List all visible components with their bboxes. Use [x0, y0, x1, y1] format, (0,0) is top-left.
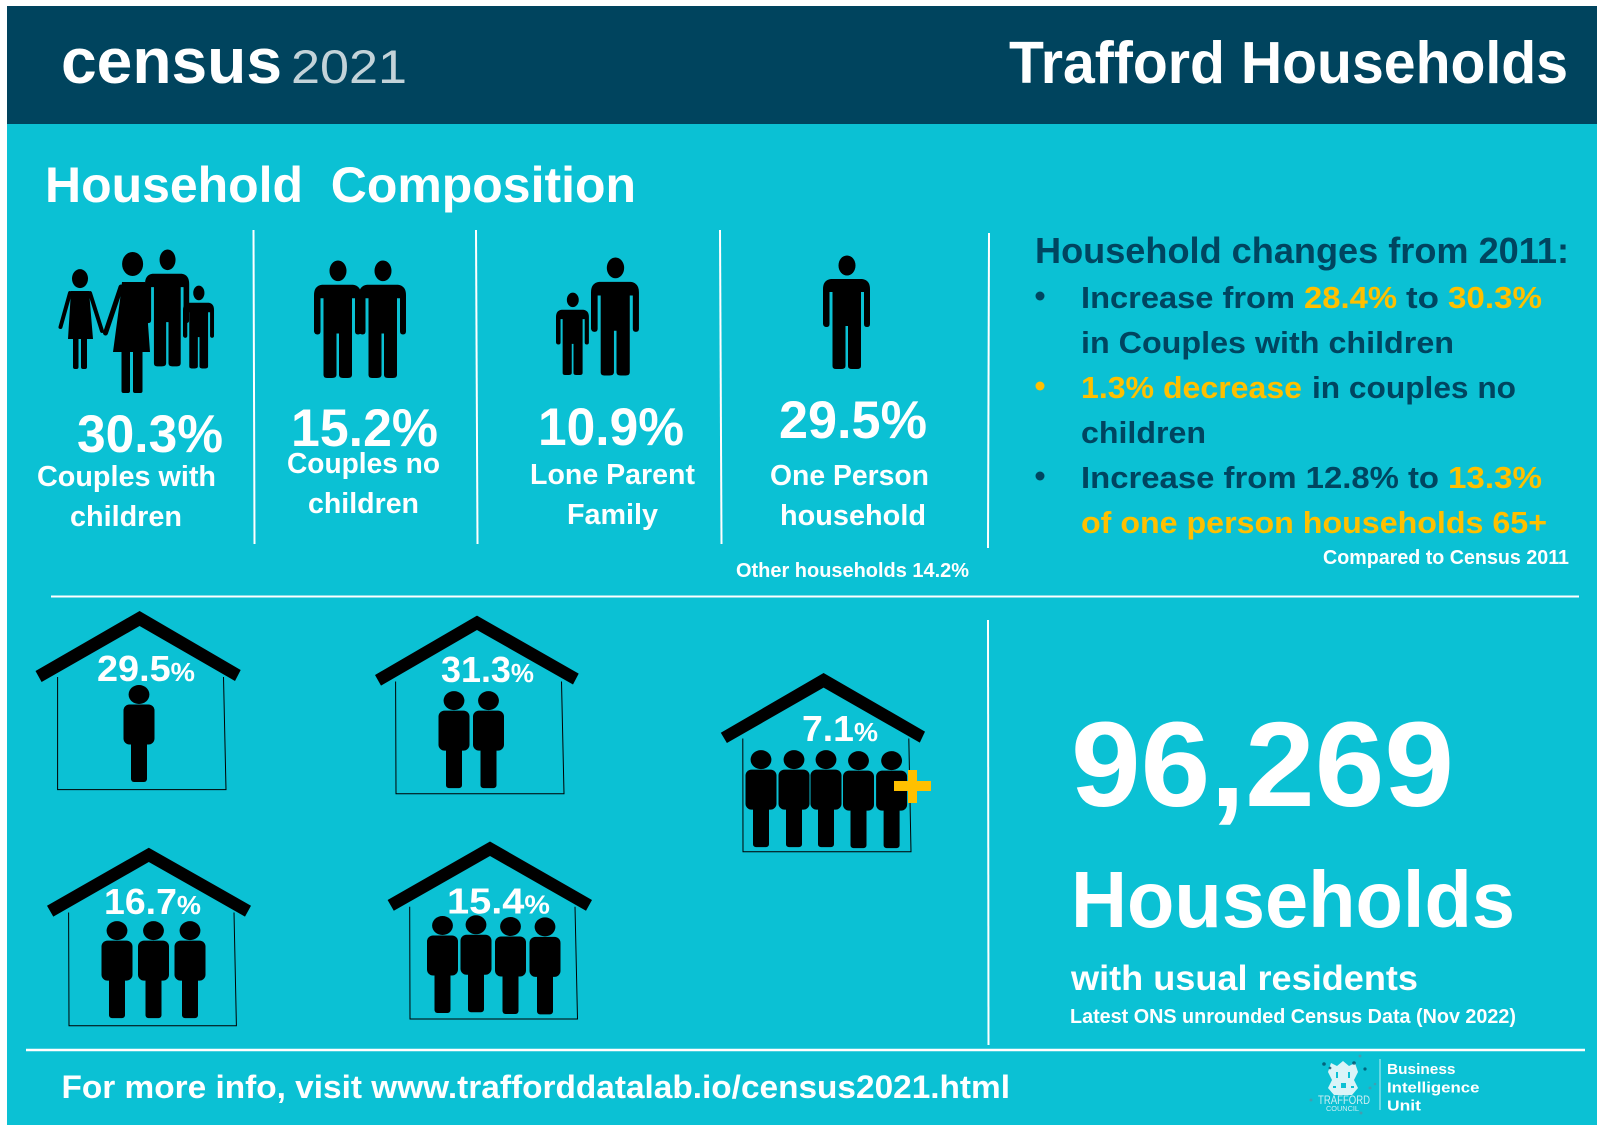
label: household	[780, 500, 926, 532]
icon: couple	[314, 260, 406, 378]
house: four people 15.4%: 15.4 %	[447, 880, 550, 922]
bullet two: in couples no	[1312, 370, 1516, 405]
panel: couples with children	[37, 249, 223, 533]
icon: parent and child	[556, 257, 639, 376]
label: children	[308, 488, 419, 520]
logo: Trafford Council Business Intelligence Unit	[1310, 1054, 1480, 1114]
house: three people 16.7%	[47, 848, 251, 1026]
label	[37, 461, 216, 533]
households label: Households	[1071, 855, 1515, 944]
house: two people 31.3%	[375, 616, 579, 794]
bullet two: 1.3% decrease	[1081, 370, 1302, 405]
house: one person 29.5%	[36, 611, 241, 790]
bullet one: 30.3%	[1448, 280, 1542, 315]
house: five or more people 7.1%	[721, 673, 931, 852]
label: Couples with	[37, 461, 216, 493]
icon: crest: COUNCIL	[1326, 1106, 1359, 1113]
house: four people 15.4%	[388, 842, 592, 1019]
label	[287, 448, 440, 520]
footer link: For more info, visit www.trafforddatalab.io/census2021.html	[62, 1069, 1010, 1105]
bullet two	[1036, 370, 1516, 450]
heading: household composition: Household Composition	[45, 157, 636, 213]
bullet three: Increase from 12.8% to	[1081, 460, 1439, 495]
label	[770, 460, 929, 532]
panel: lone parent family	[530, 257, 695, 531]
label: Lone Parent	[530, 459, 695, 491]
label: Family	[567, 499, 658, 531]
bullet one: to	[1406, 280, 1439, 315]
label	[530, 459, 695, 531]
label: children	[70, 501, 182, 533]
census 2021 logo: census	[61, 25, 282, 97]
note: other households: Other households 14.2%	[736, 560, 969, 582]
heading: Household changes from 2011:	[1035, 230, 1569, 271]
house: five or more people 7.1%: 7.1%	[802, 708, 878, 749]
title: Trafford Households	[1009, 30, 1568, 96]
census 2021 logo: 2021	[291, 40, 407, 93]
unit name: Business	[1387, 1061, 1456, 1078]
label: One Person	[770, 460, 929, 492]
bullet two: children	[1081, 415, 1206, 450]
icon: crest: TRAFFORD	[1318, 1093, 1370, 1107]
panel: couples no children	[287, 260, 440, 520]
subtitle: with usual residents	[1070, 959, 1418, 998]
bullet one: 28.4%	[1304, 280, 1397, 315]
panel: one person household	[770, 256, 929, 532]
figure: 30.3%	[77, 405, 223, 464]
unit name: Intelligence	[1387, 1080, 1480, 1096]
bullet one: Increase from	[1081, 280, 1295, 315]
census 2021 logo	[61, 25, 407, 97]
figure: 10.9%	[538, 398, 684, 457]
icon: crest	[1310, 1054, 1376, 1114]
bullet three: 13.3%	[1448, 460, 1542, 495]
big number: 96,269	[1071, 696, 1454, 832]
icon: family of four	[60, 249, 214, 393]
figure: 29.5%	[779, 391, 927, 450]
header band	[7, 6, 1597, 124]
panel: total households	[1070, 696, 1516, 1028]
label: Couples no	[287, 448, 440, 480]
house: one person 29.5%: 29.5%	[97, 648, 195, 689]
source note: Latest ONS unrounded Census Data (Nov 2022)	[1070, 1006, 1516, 1028]
house: three people 16.7%: 16.7%	[104, 881, 201, 922]
house: two people 31.3%: 31.3%	[441, 649, 534, 690]
bullet three: of one person households 65+	[1081, 505, 1547, 540]
note: Compared to Census 2011	[1323, 547, 1569, 569]
bullet one	[1036, 280, 1542, 360]
bullet one: in Couples with children	[1081, 325, 1454, 360]
unit name: Unit	[1387, 1098, 1421, 1114]
bullet three	[1036, 460, 1547, 540]
figure: 15.2%	[291, 399, 438, 458]
panel: household changes	[1035, 230, 1569, 569]
icon: plus	[894, 770, 931, 803]
column dividers	[26, 230, 1585, 1050]
icon: person	[823, 256, 870, 369]
unit name	[1387, 1061, 1480, 1114]
